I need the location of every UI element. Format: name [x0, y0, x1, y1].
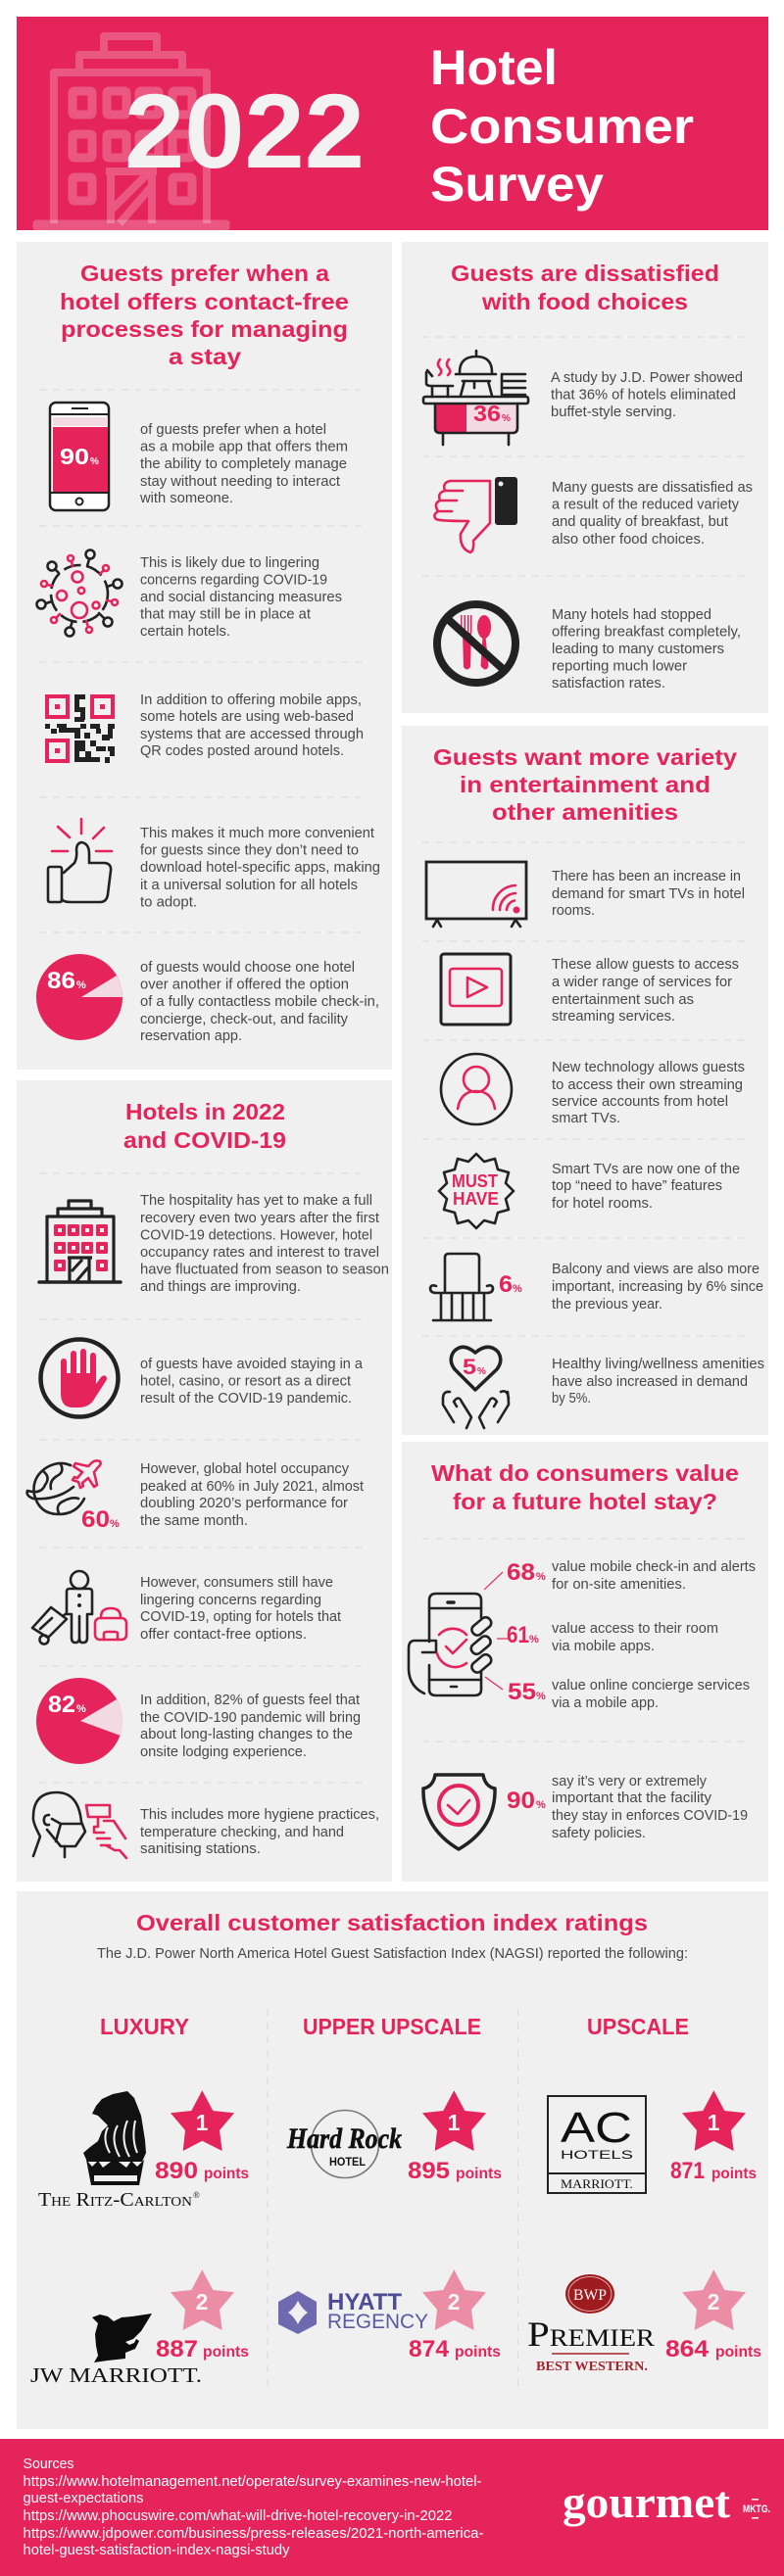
heading: Guests want more variety: [433, 744, 737, 770]
icon: shield: [423, 1775, 495, 1849]
text: room access: via mobile apps.: [552, 1638, 655, 1654]
stat: 55%: 55: [508, 1679, 536, 1705]
text: QR systems: In addition to offering mobile apps,: [140, 692, 362, 708]
panel: satisfaction ratings: [17, 1891, 768, 2429]
stat: 55%: %: [536, 1691, 546, 1702]
heading: Guests are dissatisfied: [451, 261, 719, 286]
text: convenience: This makes it much more convenient: [140, 825, 375, 841]
icon: smart TV: [426, 862, 526, 927]
icon: phone 90%: [50, 403, 109, 510]
heading: hotel offers contact-free: [60, 289, 349, 314]
text: wellness: Healthy living/wellness amenities: [552, 1356, 764, 1372]
heading: [433, 744, 737, 825]
rank 2 star: upper upscale: [422, 2269, 486, 2330]
text: convenience: download hotel-specific apps, making: [140, 859, 380, 876]
chart: pie 86%: 86: [47, 968, 75, 994]
header banner: [17, 17, 768, 230]
text: safety policies: they stay in enforces COVID-19: [552, 1807, 748, 1824]
text: avoided hotels: [140, 1356, 364, 1407]
logo: AC Hotels Marriott: MARRIOTT.: [561, 2176, 633, 2191]
icon: must have badge: MUST: [452, 1171, 498, 1191]
text: smart TVs: demand for smart TVs in hotel: [552, 885, 745, 902]
stat: 90%: [507, 1788, 546, 1814]
heading: a stay: [169, 344, 241, 369]
score: 864 points: points: [715, 2344, 761, 2361]
text: hospitality recovery: [140, 1192, 389, 1295]
text: buffet study: [551, 369, 743, 420]
text: concierge: [552, 1677, 750, 1711]
logo: Hard Rock Hotel: Hard Rock: [286, 2123, 402, 2155]
title: Consumer: [430, 99, 694, 154]
icon: must have badge: [439, 1154, 514, 1228]
panel: contact-free processes: [17, 242, 392, 1070]
text: lingering concerns: [140, 1574, 342, 1643]
stat: 68%: [507, 1559, 546, 1586]
score: 871 points: 871: [670, 2158, 705, 2184]
text: balcony: Balcony and views are also more: [552, 1261, 760, 1277]
text: need to have: for hotel rooms.: [552, 1195, 653, 1212]
text: room access: value access to their room: [552, 1620, 718, 1637]
logo: gourmet: gourmet: [563, 2477, 731, 2527]
text: wellness: by 5%.: [552, 1390, 591, 1407]
sources: https://www.jdpower.com/business/press-releases/2021-north-america-: [24, 2525, 484, 2542]
score: 895 points: 895: [408, 2158, 450, 2184]
text: mobile app: of guests prefer when a hotel: [140, 421, 326, 438]
subtitle: The J.D. Power North America Hotel Guest Satisfaction Index (NAGSI) reported the following:: [97, 1945, 688, 1962]
logo: MKTG: [743, 2499, 770, 2519]
heading: [451, 261, 719, 314]
icon: globe and plane 60%: [27, 1460, 120, 1533]
heading: in entertainment and: [460, 772, 710, 797]
text: balcony: important, increasing by 6% since: [552, 1278, 763, 1295]
text: contactless choice: concierge, check-out, and facility: [140, 1011, 348, 1027]
text: breakfast stopped: satisfaction rates.: [552, 675, 665, 692]
text: dissatisfied: also other food choices.: [552, 531, 705, 548]
logo: AC Hotels Marriott: AC: [561, 2104, 632, 2152]
text: mobile app: as a mobile app that offers them: [140, 439, 348, 454]
title: Hotel: [430, 40, 558, 95]
logo: Premier Best Western: Premier: [527, 2314, 655, 2354]
text: avoided hotels: result of the COVID-19 pandemic.: [140, 1390, 352, 1407]
rank 2 star: luxury: [171, 2269, 234, 2330]
rank 2 star: upscale: [682, 2269, 746, 2330]
rank 2 star: luxury: 2: [196, 2289, 208, 2314]
score: 895 points: points: [456, 2166, 502, 2182]
text: safety policies: important that the facility: [552, 1789, 711, 1806]
text: streaming: entertainment such as: [552, 991, 694, 1008]
text: lingering concerns: and social distancing measures: [140, 589, 342, 605]
logo: Premier Best Western: BWP: [573, 2287, 607, 2304]
text: avoided hotels: hotel, casino, or resort as a direct: [140, 1373, 352, 1389]
logo: AC Hotels Marriott: HOTELS: [561, 2148, 633, 2162]
score: 887 points: [156, 2336, 249, 2362]
text: hygiene: This includes more hygiene practices,: [140, 1806, 379, 1823]
rank 2 star: upper upscale: 2: [448, 2289, 460, 2314]
score: 874 points: points: [455, 2344, 501, 2361]
text: lingering concerns: lingering concerns regarding: [140, 1592, 321, 1608]
text: need to have: [552, 1161, 740, 1212]
icon: heart in hands 5%: 5: [463, 1355, 476, 1379]
text: long-lasting changes: [140, 1692, 361, 1760]
rank 1 star: luxury: [171, 2090, 234, 2151]
text: streaming: a wider range of services for: [552, 974, 732, 990]
icon: buffet 36%: 36: [473, 401, 501, 426]
text: breakfast stopped: leading to many customers: [552, 641, 724, 657]
text: mobile app: the ability to completely manage: [140, 455, 347, 472]
logo: AC Hotels Marriott: [548, 2096, 646, 2193]
heading: [431, 1460, 739, 1514]
sources: guest-expectations: [24, 2490, 143, 2506]
icon: QR code: [45, 694, 115, 763]
text: hospitality recovery: The hospitality has yet to make a full: [140, 1192, 372, 1209]
stat: 90%: 90: [507, 1788, 535, 1814]
heading: What do consumers value: [431, 1460, 739, 1486]
text: global occupancy: [140, 1460, 365, 1529]
text: streaming: These allow guests to access: [552, 956, 739, 973]
sources: https://www.hotelmanagement.net/operate/survey-examines-new-hotel-: [24, 2473, 482, 2490]
text: hospitality recovery: COVID-19 detections. However, hotel: [140, 1226, 372, 1244]
text: mobile check-in: for on-site amenities.: [552, 1576, 686, 1593]
score: 864 points: 864: [665, 2336, 710, 2362]
logo: Premier Best Western: BEST WESTERN.: [536, 2360, 648, 2374]
score: 895 points: [408, 2158, 502, 2184]
text: convenience: for guests since they don’t need to: [140, 842, 359, 858]
stat: 68%: 68: [507, 1559, 535, 1586]
logo: Hyatt Regency: HYATT: [327, 2289, 402, 2315]
icon: thumbs up: [48, 819, 112, 902]
rank 1 star: upper upscale: 1: [448, 2110, 461, 2135]
text: lingering concerns: offer contact-free options.: [140, 1626, 307, 1643]
text: contactless choice: reservation app.: [140, 1027, 242, 1044]
text: long-lasting changes: In addition, 82% of guests feel that: [140, 1692, 361, 1708]
score: 874 points: [409, 2336, 501, 2362]
icon: globe and plane 60%: %: [110, 1518, 120, 1530]
logo: Ritz-Carlton: ®: [193, 2190, 200, 2200]
rank 1 star: luxury: 1: [196, 2110, 209, 2135]
column heading: upscale: UPSCALE: [587, 2014, 689, 2039]
text: accounts: to access their own streaming: [552, 1076, 743, 1093]
column heading: luxury: LUXURY: [100, 2014, 189, 2039]
year: 2022: [124, 72, 365, 190]
text: smart TVs: rooms.: [552, 902, 595, 919]
text: contactless choice: of guests would choose one hotel: [140, 959, 355, 976]
icon: balcony 6%: [430, 1254, 522, 1320]
title: [430, 40, 694, 212]
text: global occupancy: peaked at 60% in July 2021, almost: [140, 1478, 365, 1495]
text: QR systems: [140, 692, 364, 759]
text: balcony: [552, 1261, 763, 1312]
score: 887 points: 887: [156, 2336, 198, 2362]
icon: buffet 36%: [423, 351, 528, 445]
text: dissatisfied: [552, 479, 753, 548]
logo: MKTG: MKTG.: [743, 2504, 770, 2515]
text: long-lasting changes: about long-lasting changes to the: [140, 1726, 353, 1742]
rank 1 star: upper upscale: [422, 2090, 486, 2151]
icon: balcony 6%: 6: [499, 1271, 513, 1298]
text: accounts: smart TVs.: [552, 1110, 620, 1126]
chart: pie 86%: %: [76, 979, 86, 991]
text: QR systems: QR codes posted around hotels.: [140, 742, 344, 759]
text: buffet study: buffet-style serving.: [551, 404, 676, 420]
text: dissatisfied: Many guests are dissatisfied as: [552, 479, 753, 496]
text: hygiene: temperature checking, and hand: [140, 1824, 344, 1840]
text: safety policies: safety policies.: [552, 1825, 646, 1841]
heading: processes for managing: [61, 316, 348, 342]
text: hygiene: [140, 1806, 379, 1857]
icon: user: [441, 1054, 512, 1124]
icon: globe and plane 60%: 60: [81, 1506, 110, 1533]
rank 1 star: upscale: 1: [708, 2110, 720, 2135]
text: streaming: streaming services.: [552, 1008, 675, 1025]
icon: stop hand: [41, 1340, 118, 1416]
text: safety policies: say it’s very or extremely: [552, 1773, 707, 1789]
chart: pie 82%: %: [76, 1703, 86, 1715]
text: streaming: [552, 956, 739, 1025]
panel: entertainment and amenities: [402, 726, 768, 1435]
heading: [60, 261, 349, 369]
text: convenience: to adopt.: [140, 893, 197, 911]
text: dissatisfied: and quality of breakfast, but: [552, 513, 729, 530]
text: lingering concerns: This is likely due to lingering: [140, 554, 319, 571]
score: 890 points: 890: [155, 2158, 198, 2184]
text: mobile app: [139, 421, 348, 506]
text: smart TVs: [552, 868, 745, 919]
text: smart TVs: There has been an increase in: [552, 868, 741, 884]
text: wellness: [552, 1356, 764, 1407]
text: lingering concerns: [140, 554, 342, 640]
sources: https://www.phocuswire.com/what-will-drive-hotel-recovery-in-2022: [24, 2507, 453, 2524]
text: lingering concerns: However, consumers still have: [140, 1574, 333, 1591]
sources: [24, 2456, 484, 2558]
text: global occupancy: doubling 2020’s performance for: [140, 1495, 348, 1511]
text: mobile app: stay without needing to interact: [140, 473, 341, 490]
icon: play: [441, 954, 511, 1025]
stat: 90%: %: [536, 1799, 546, 1811]
score: 874 points: 874: [409, 2336, 450, 2362]
icon: hotel building watermark: [36, 36, 226, 227]
text: hospitality recovery: and things are improving.: [140, 1278, 301, 1295]
score: 890 points: [155, 2158, 249, 2184]
text: contactless choice: [140, 959, 379, 1044]
text: accounts: New technology allows guests: [552, 1059, 745, 1075]
icon: phone 90%: %: [90, 456, 99, 467]
text: balcony: the previous year.: [552, 1296, 662, 1312]
text: buffet study: that 36% of hotels eliminated: [551, 386, 736, 404]
text: hospitality recovery: recovery even two years after the first: [140, 1210, 380, 1226]
title: Survey: [430, 157, 604, 212]
chart: pie 86%: [36, 954, 122, 1040]
text: hospitality recovery: occupancy rates and interest to travel: [140, 1244, 379, 1261]
text: concierge: via a mobile app.: [552, 1694, 659, 1711]
icon: buffet 36%: %: [502, 413, 511, 424]
icon: phone in hand with check: [409, 1594, 493, 1695]
rank 2 star: upscale: 2: [708, 2289, 719, 2314]
score: 890 points: points: [204, 2166, 249, 2182]
text: convenience: [140, 825, 380, 911]
logo: Hard Rock Hotel: HOTEL: [329, 2155, 366, 2169]
sources: hotel-guest-satisfaction-index-nagsi-study: [24, 2542, 290, 2558]
text: breakfast stopped: offering breakfast completely,: [552, 623, 741, 641]
text: hospitality recovery: have fluctuated from season to season: [140, 1262, 389, 1277]
heading: Overall customer satisfaction index ratings: [136, 1910, 648, 1935]
text: safety policies: [552, 1773, 748, 1841]
text: accounts: [552, 1059, 745, 1126]
callout lines: [484, 1572, 509, 1690]
heading: with food choices: [481, 289, 688, 314]
text: breakfast stopped: Many hotels had stopped: [552, 606, 711, 623]
icon: balcony 6%: %: [513, 1283, 522, 1295]
text: convenience: it a universal solution for all hotels: [140, 877, 358, 893]
heading: other amenities: [492, 799, 678, 825]
icon: traveller with luggage: [32, 1571, 126, 1644]
heading: [123, 1099, 286, 1153]
chart: pie 82%: 82: [48, 1692, 75, 1718]
score: 871 points: points: [711, 2166, 757, 2182]
chart: pie 82%: [36, 1678, 122, 1764]
text: wellness: have also increased in demand: [552, 1373, 748, 1390]
text: long-lasting changes: onsite lodging experience.: [140, 1743, 307, 1760]
text: contactless choice: of a fully contactless mobile check-in,: [140, 993, 379, 1010]
text: QR systems: systems that are accessed through: [140, 726, 364, 742]
text: avoided hotels: of guests have avoided staying in a: [140, 1356, 364, 1372]
text: lingering concerns: certain hotels.: [140, 623, 230, 640]
text: QR systems: some hotels are using web-based: [140, 708, 354, 725]
icon: phone 90%: 90: [60, 444, 89, 469]
text: global occupancy: However, global hotel occupancy: [140, 1460, 349, 1477]
stat: 61%: 61: [507, 1622, 529, 1648]
heading: for a future hotel stay?: [453, 1489, 717, 1514]
text: need to have: Smart TVs are now one of the: [552, 1161, 740, 1177]
logo: Ritz-Carlton: The Ritz-Carlton: [38, 2189, 192, 2211]
text: room access: [552, 1620, 718, 1654]
score: 864 points: [665, 2336, 761, 2362]
text: buffet study: A study by J.D. Power showed: [551, 369, 743, 386]
heading: and COVID-19: [123, 1127, 286, 1153]
panel: future hotel stay: [402, 1442, 768, 1882]
text: hygiene: sanitising stations.: [140, 1840, 261, 1857]
logo: Hyatt Regency: [278, 2289, 428, 2334]
icon: heart in hands 5%: [443, 1347, 509, 1428]
text: lingering concerns: that may still be in place at: [140, 605, 312, 623]
text: dissatisfied: a result of the reduced variety: [552, 496, 739, 513]
logo: Hard Rock Hotel: [286, 2110, 402, 2178]
sources: Sources: [24, 2456, 74, 2472]
text: mobile check-in: [552, 1558, 756, 1593]
score: 871 points: [670, 2158, 757, 2184]
logo: JW Marriott: JW MARRIOTT.: [30, 2363, 202, 2387]
text: breakfast stopped: [552, 606, 741, 692]
text: need to have: top “need to have” features: [552, 1177, 722, 1194]
heading: Hotels in 2022: [125, 1099, 285, 1124]
text: accounts: service accounts from hotel: [552, 1093, 728, 1110]
logo: Ritz-Carlton: [38, 2091, 200, 2211]
text: contactless choice: over another if offered the option: [140, 976, 349, 993]
text: lingering concerns: concerns regarding COVID-19: [140, 572, 327, 588]
column heading: upper upscale: UPPER UPSCALE: [303, 2014, 481, 2039]
text: lingering concerns: COVID-19, opting for hotels that: [140, 1608, 342, 1625]
icon: no food: [437, 604, 515, 683]
stat: 68%: %: [536, 1571, 546, 1583]
text: mobile check-in: value mobile check-in and alerts: [552, 1558, 756, 1575]
text: global occupancy: the same month.: [140, 1512, 248, 1529]
icon: thumbs down: [434, 477, 517, 552]
footer: [0, 2439, 784, 2576]
logo: Premier Best Western: [527, 2274, 655, 2374]
text: long-lasting changes: the COVID-190 pandemic will bring: [140, 1709, 361, 1726]
heading: Guests prefer when a: [80, 261, 329, 286]
icon: hotel: [39, 1201, 121, 1282]
icon: mask and thermometer: [33, 1792, 126, 1858]
rank 1 star: upscale: [682, 2090, 746, 2151]
stat: 55%: [508, 1679, 546, 1705]
icon: heart in hands 5%: %: [477, 1366, 486, 1377]
icon: must have badge: HAVE: [453, 1189, 499, 1209]
text: mobile app: with someone.: [139, 490, 233, 506]
stat: 61%: %: [529, 1634, 539, 1646]
score: 887 points: points: [203, 2344, 249, 2361]
logo: Hyatt Regency: REGENCY: [327, 2311, 428, 2333]
icon: virus: [37, 550, 122, 637]
text: breakfast stopped: reporting much lower: [552, 658, 687, 674]
text: concierge: value online concierge services: [552, 1677, 750, 1693]
panel: hotels and COVID-19: [17, 1080, 392, 1882]
panel: food choices: [402, 242, 768, 713]
logo: JW Marriott: [30, 2314, 202, 2387]
